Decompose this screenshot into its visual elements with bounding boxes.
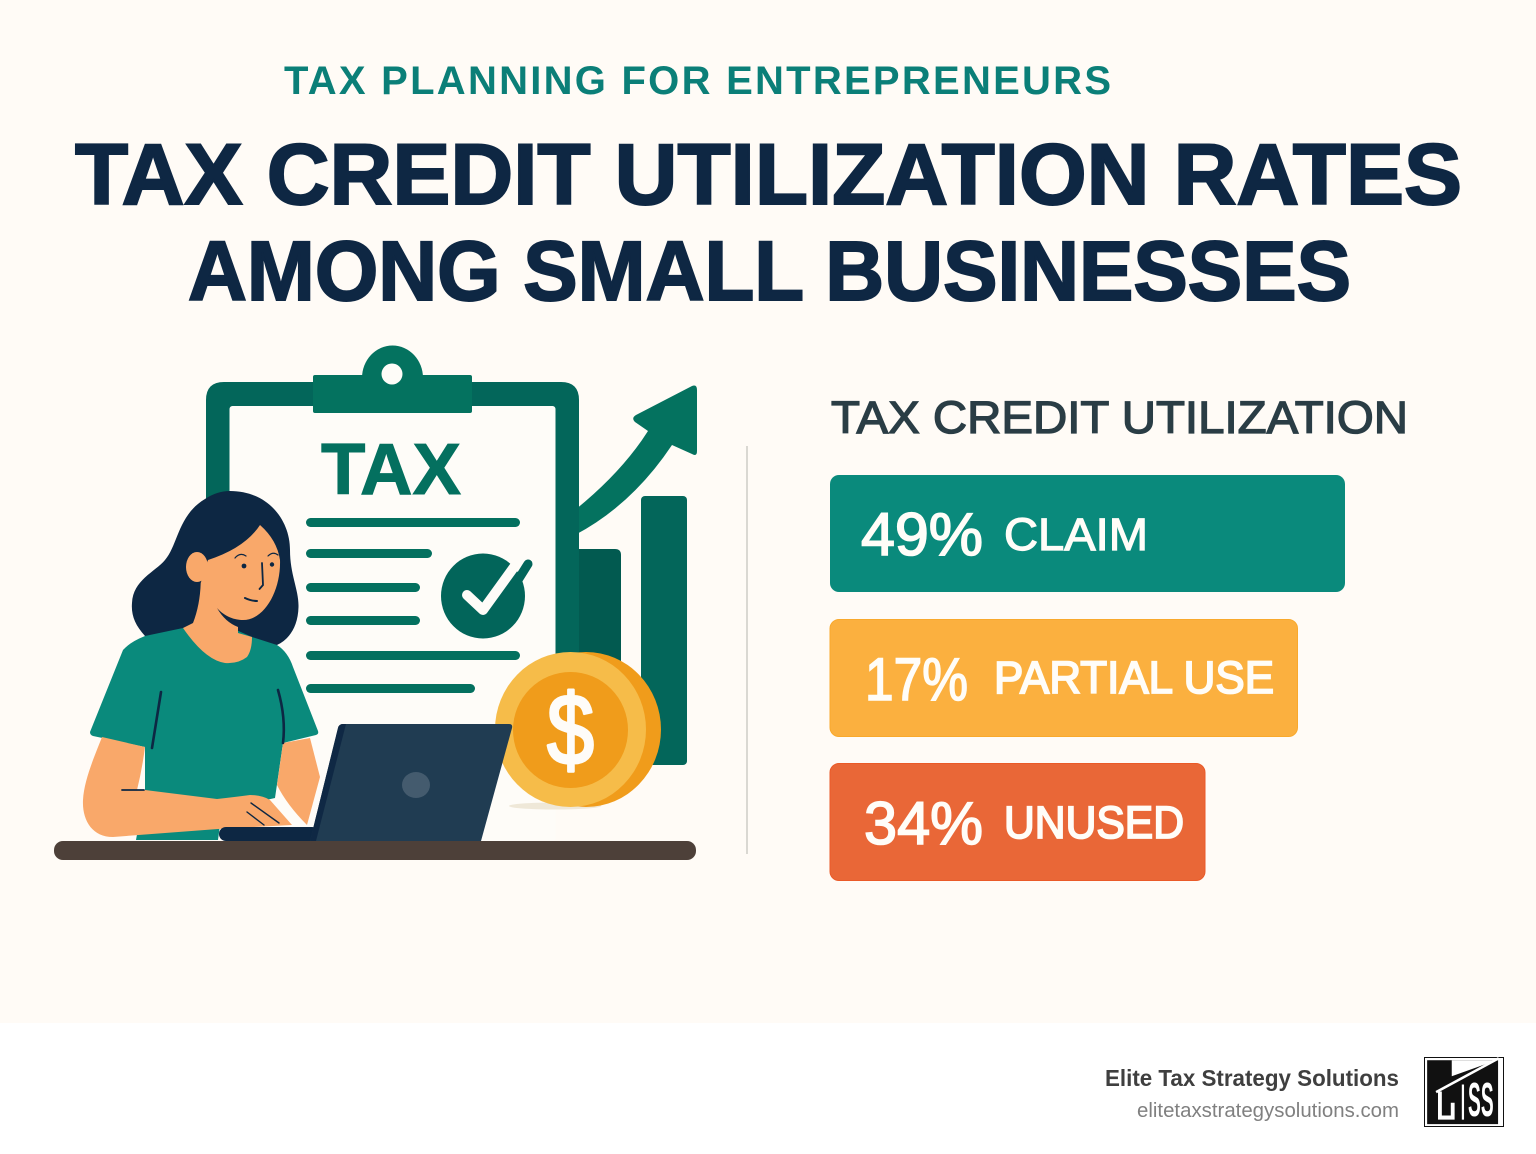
footer brand name: Elite Tax Strategy Solutions <box>1105 1065 1399 1091</box>
icon: dollar coin: $ <box>547 674 594 786</box>
bar: 34% unused: 34% <box>864 790 983 857</box>
bar: 49% claim <box>830 475 1345 592</box>
footer logo: SS <box>1468 1074 1494 1127</box>
icon: rising bar chart behind clipboard <box>570 496 687 765</box>
person <box>83 491 320 840</box>
left arm <box>83 737 292 837</box>
bar: 49% claim: 49% <box>861 501 983 568</box>
icon: growth arrow <box>575 386 697 535</box>
facial features <box>235 553 278 601</box>
bar: 17% partial use <box>830 620 1298 736</box>
main title <box>75 127 1462 318</box>
bar: 34% unused: UNUSED <box>1004 797 1184 848</box>
hair <box>132 491 299 645</box>
footer logo <box>1424 1058 1504 1127</box>
right arm <box>277 738 320 825</box>
eyebrow heading: TAX PLANNING FOR ENTREPRENEURS <box>284 59 1111 103</box>
icon: check badge <box>441 554 528 638</box>
clipboard clip <box>313 345 472 413</box>
bar: 34% unused <box>830 764 1205 880</box>
vertical divider <box>746 446 748 854</box>
face and neck <box>183 525 280 663</box>
footer band <box>0 1023 1536 1154</box>
title line 2: AMONG SMALL BUSINESSES <box>188 224 1351 318</box>
footer website: elitetaxstrategysolutions.com <box>1137 1100 1399 1122</box>
sleeve and arm creases <box>122 690 284 825</box>
bar: 17% partial use: 17% <box>865 646 968 713</box>
title line 1: TAX CREDIT UTILIZATION RATES <box>75 127 1462 223</box>
bar: 17% partial use: PARTIAL USE <box>994 652 1274 703</box>
bar chart <box>830 475 1345 880</box>
icon: clipboard <box>206 345 579 841</box>
teal shirt <box>90 625 318 840</box>
icon: laptop <box>219 724 512 841</box>
desk <box>54 841 696 860</box>
chart heading: TAX CREDIT UTILIZATION <box>831 392 1408 443</box>
ear <box>186 552 208 582</box>
illustration: woman with tax clipboard, laptop and coin <box>54 345 697 860</box>
bar: 49% claim: CLAIM <box>1004 509 1148 560</box>
document text lines <box>306 518 520 693</box>
icon: dollar coin <box>495 652 661 810</box>
clipboard TAX label: TAX <box>321 430 461 510</box>
